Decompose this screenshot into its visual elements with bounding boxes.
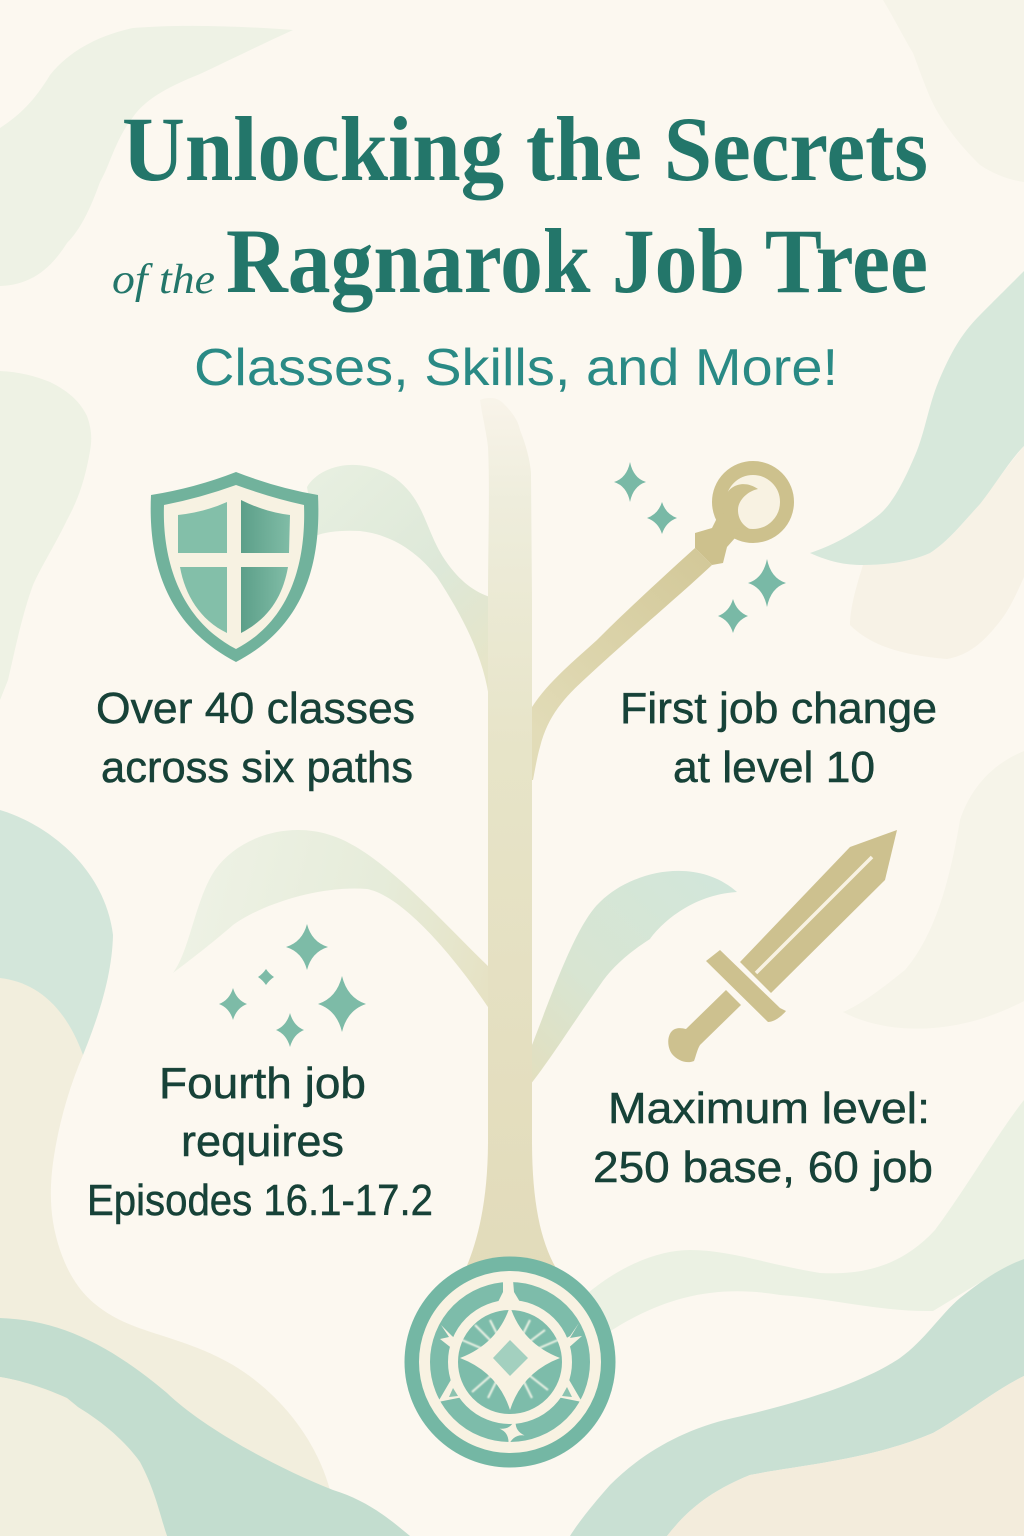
icon: magic staff with sparkles — [532, 462, 787, 780]
icon: sparkles cluster — [219, 924, 366, 1047]
text: fourth job: requires — [181, 1117, 344, 1166]
text: over 40 classes: Over 40 classes — [96, 684, 415, 733]
text: fourth job: Episodes 16.1-17.2 — [87, 1176, 433, 1225]
text: first job change: First job change — [620, 684, 937, 733]
trunk — [466, 398, 556, 1300]
title line two: of the: of the — [112, 257, 215, 303]
text: over 40 classes — [96, 684, 415, 792]
text: first job change: at level 10 — [673, 743, 875, 792]
tree trunk and branches — [173, 398, 737, 1300]
upper left leaf — [307, 465, 490, 705]
icon: shield — [151, 472, 318, 662]
text: first job change — [620, 684, 937, 792]
central star — [460, 1306, 560, 1410]
text: over 40 classes: across six paths — [101, 743, 413, 792]
sparkles — [614, 462, 786, 633]
text: fourth job — [87, 1059, 433, 1225]
text: maximum level: Maximum level: — [608, 1084, 930, 1133]
icon: sword — [668, 830, 897, 1062]
lower left leaf — [173, 830, 490, 1010]
title line two: Ragnarok Job Tree: Ragnarok Job Tree — [226, 210, 928, 312]
title — [112, 98, 928, 312]
lower right leaf — [530, 871, 737, 1085]
text: maximum level: 250 base, 60 job — [593, 1143, 933, 1192]
title: Unlocking the Secrets — [122, 98, 928, 200]
text: maximum level — [593, 1084, 933, 1192]
subtitle: Classes, Skills, and More! — [194, 339, 838, 397]
text: fourth job: Fourth job — [159, 1059, 366, 1108]
emblem at tree root — [404, 1256, 616, 1468]
